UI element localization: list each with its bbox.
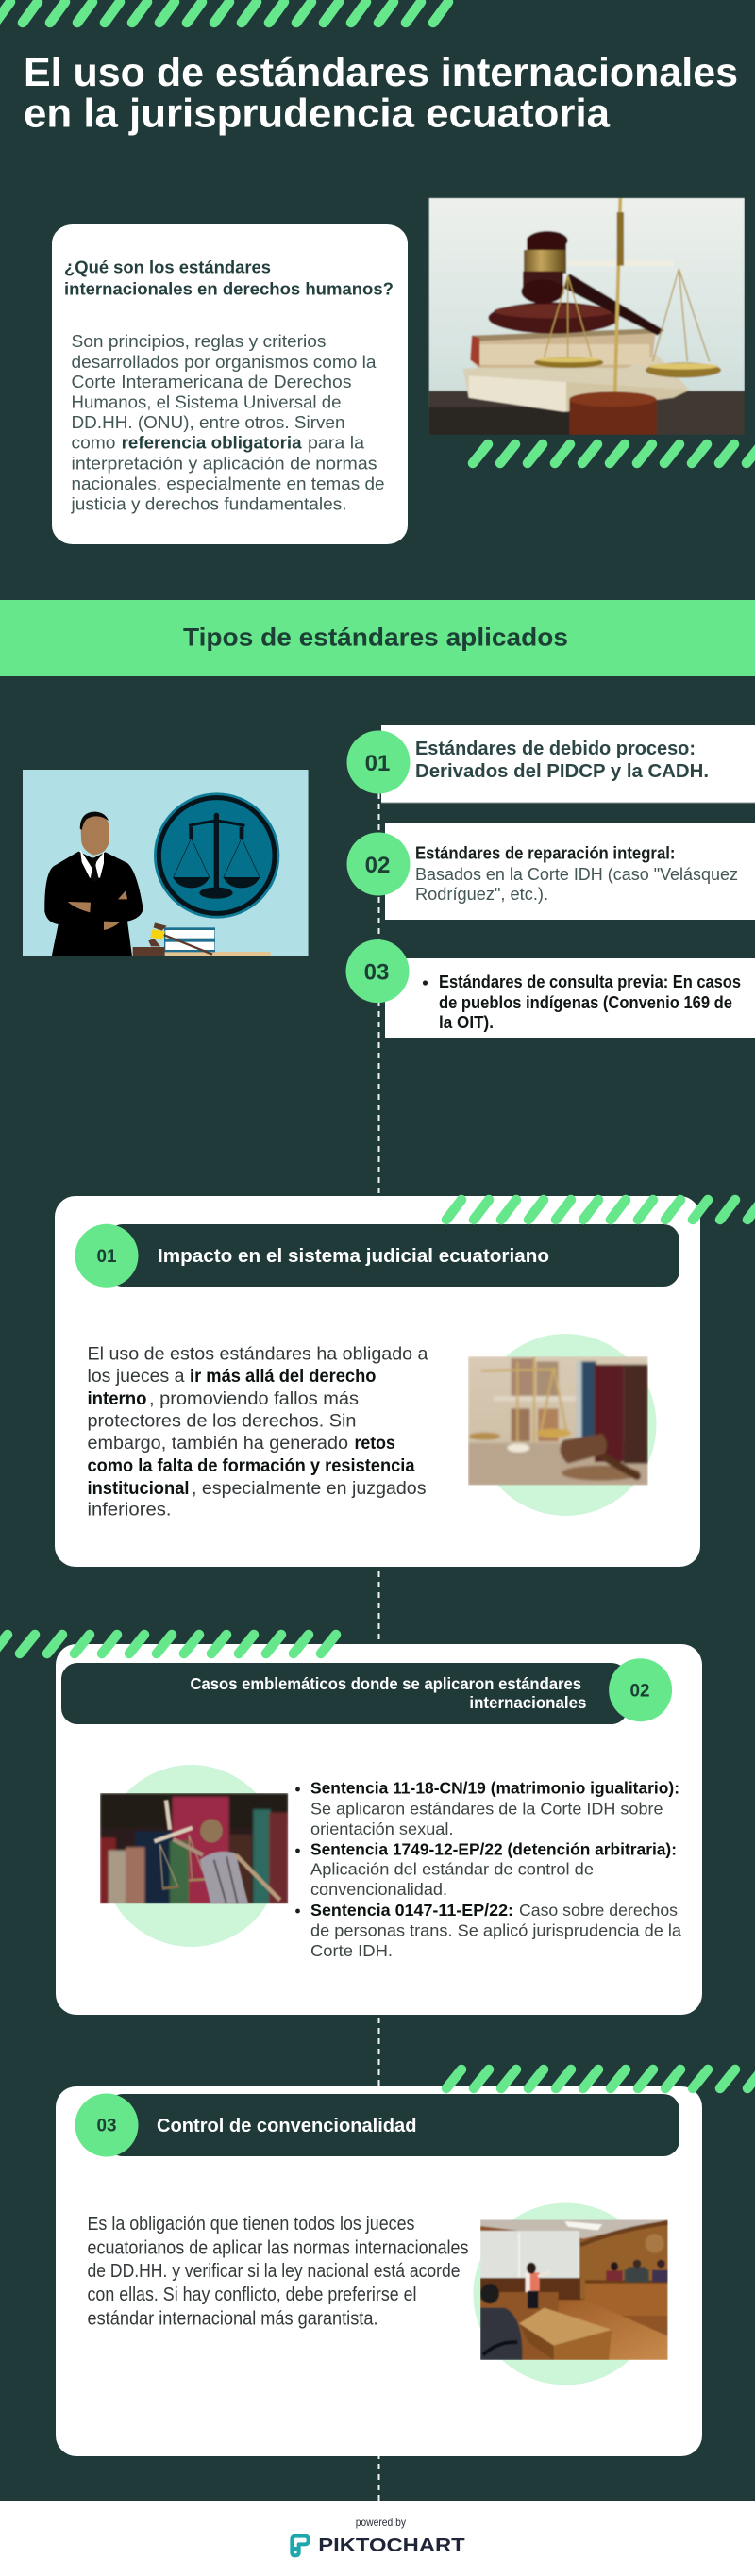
light green circle 02	[102, 1765, 281, 1947]
header bar 02	[61, 1658, 672, 1724]
body text 01: los jueces a	[87, 1367, 185, 1387]
photo: courtroom	[480, 2219, 668, 2360]
case list: Sentencia 1749-12-EP/22 (detención arbitraria):	[310, 1840, 677, 1859]
panel heading: internacionales en derechos humanos?	[64, 279, 394, 298]
photo: lady justice statue	[100, 1793, 288, 1903]
section banner: tipos de estándares: Tipos de estándares aplicados	[183, 623, 568, 651]
case list: convencionalidad.	[310, 1880, 447, 1899]
list item 02: Rodríguez", etc.).	[415, 885, 548, 904]
body text 01: interno	[87, 1389, 147, 1409]
panel body text: Humanos, el Sistema Universal de	[72, 393, 342, 412]
body text 01: institucional	[87, 1479, 189, 1499]
section banner: tipos de estándares	[0, 600, 755, 676]
panel 02: casos emblemáticos	[56, 1644, 702, 2015]
panel: what are the standards	[52, 224, 408, 544]
list item 02	[347, 823, 755, 920]
body text 03: ecuatorianos de aplicar las normas internacionales	[87, 2237, 468, 2258]
list item 02: Basados en la Corte IDH (caso "Velásquez	[415, 865, 738, 884]
footer: powered by piktochart: powered by	[356, 2516, 406, 2529]
header bar 03: 03	[96, 2116, 117, 2136]
header bar 02: 02	[630, 1682, 649, 1702]
body text 03: Es la obligación que tienen todos los jueces	[87, 2214, 415, 2235]
case list: orientación sexual.	[310, 1820, 453, 1838]
list item 01	[347, 725, 755, 803]
illustration: lawyer and scales emblem	[23, 770, 309, 956]
photo: blurred gavel and books	[468, 1356, 648, 1486]
panel body text: DD.HH. (ONU), entre otros. Sirven	[72, 413, 345, 432]
light green circle 01	[476, 1334, 657, 1516]
panel body text: referencia obligatoria	[122, 434, 303, 453]
list item 01: 01	[365, 751, 390, 776]
list item 03: de pueblos indígenas (Convenio 169 de	[439, 993, 732, 1012]
list item 03: la OIT).	[439, 1013, 494, 1032]
timeline dashed connector	[378, 762, 379, 2501]
light green circle 03	[474, 2203, 659, 2385]
photo: gavel, books and scales	[428, 198, 745, 435]
decorative stripes: panel 01	[446, 1200, 755, 1220]
body text 01: , promoviendo fallos más	[149, 1389, 359, 1409]
body text 01: embargo, también ha generado	[87, 1434, 348, 1454]
body text 01: como la falta de formación y resistencia	[87, 1456, 415, 1476]
panel body text: justicia y derechos fundamentales.	[70, 494, 347, 513]
header bar 02: Casos emblemáticos donde se aplicaron estándares	[191, 1674, 581, 1693]
body text 01: El uso de estos estándares ha obligado a	[87, 1345, 428, 1365]
title	[24, 50, 738, 136]
decorative stripes: panel 03	[446, 2069, 755, 2088]
case list: Caso sobre derechos	[519, 1901, 678, 1920]
body text 01: inferiores.	[87, 1501, 172, 1521]
body text 01: , especialmente en juzgados	[192, 1479, 427, 1499]
body text 03: de DD.HH. y verificar si la ley nacional está acorde	[87, 2261, 461, 2282]
list item 02: 02	[365, 853, 390, 878]
case list: Aplicación del estándar de control de	[310, 1860, 594, 1879]
body text 03	[87, 2214, 468, 2330]
decorative stripes: under photo	[473, 444, 755, 463]
panel heading: ¿Qué son los estándares	[64, 258, 271, 277]
decorative stripes: top	[0, 2, 448, 23]
case list: Sentencia 11-18-CN/19 (matrimonio igualitario):	[310, 1779, 680, 1798]
header bar 01: 01	[96, 1247, 117, 1267]
panel body text: desarrollados por organismos como la	[72, 353, 378, 372]
header bar 02: internacionales	[469, 1693, 587, 1712]
list item 01: Estándares de debido proceso:	[415, 739, 696, 759]
list item 03: 03	[364, 960, 389, 985]
panel body text: como	[72, 434, 115, 453]
icon: piktochart logo	[292, 2536, 309, 2555]
header bar 03	[76, 2094, 680, 2156]
case list: Se aplicaron estándares de la Corte IDH sobre	[310, 1800, 663, 1819]
case list: de personas trans. Se aplicó jurisprudencia de la	[310, 1921, 681, 1940]
footer: powered by piktochart: PIKTOCHART	[318, 2535, 465, 2556]
man in suit	[44, 812, 143, 956]
case list	[295, 1779, 681, 1960]
panel body text: nacionales, especialmente en temas de	[72, 474, 385, 493]
body text 01: retos	[355, 1434, 395, 1454]
panel 01: impacto	[55, 1196, 700, 1567]
panel body text: Corte Interamericana de Derechos	[72, 373, 351, 391]
decorative stripes: panel 02	[0, 1635, 336, 1654]
footer: powered by piktochart	[0, 2501, 755, 2576]
body text 01	[87, 1345, 428, 1521]
panel 03: control de convencionalidad	[56, 2086, 702, 2456]
panel heading	[64, 258, 394, 298]
header bar 03: Control de convencionalidad	[157, 2116, 417, 2136]
panel body text: Son principios, reglas y criterios	[72, 332, 327, 351]
title: El uso de estándares internacionales	[24, 50, 738, 95]
header bar 01: Impacto en el sistema judicial ecuatoriano	[158, 1246, 549, 1267]
panel body text: interpretación y aplicación de normas	[72, 454, 378, 473]
body text 01: ir más allá del derecho	[190, 1367, 376, 1387]
list item 01: Derivados del PIDCP y la CADH.	[415, 761, 709, 782]
case list: Sentencia 0147-11-EP/22:	[310, 1901, 513, 1920]
header bar 01	[76, 1224, 680, 1288]
body text 01: protectores de los derechos. Sin	[87, 1412, 357, 1432]
panel body text	[70, 332, 385, 513]
body text 03: estándar internacional más garantista.	[87, 2309, 378, 2330]
emblem: scales of justice	[154, 792, 279, 919]
body text 03: con ellas. Si hay conflicto, debe preferirse el	[87, 2285, 417, 2305]
list item 02: Estándares de reparación integral:	[415, 844, 676, 863]
gavel and books	[133, 922, 271, 956]
panel body text: para la	[308, 434, 365, 453]
case list: Corte IDH.	[310, 1941, 393, 1960]
title: en la jurisprudencia ecuatoria	[24, 91, 611, 136]
list item 03	[345, 939, 755, 1038]
